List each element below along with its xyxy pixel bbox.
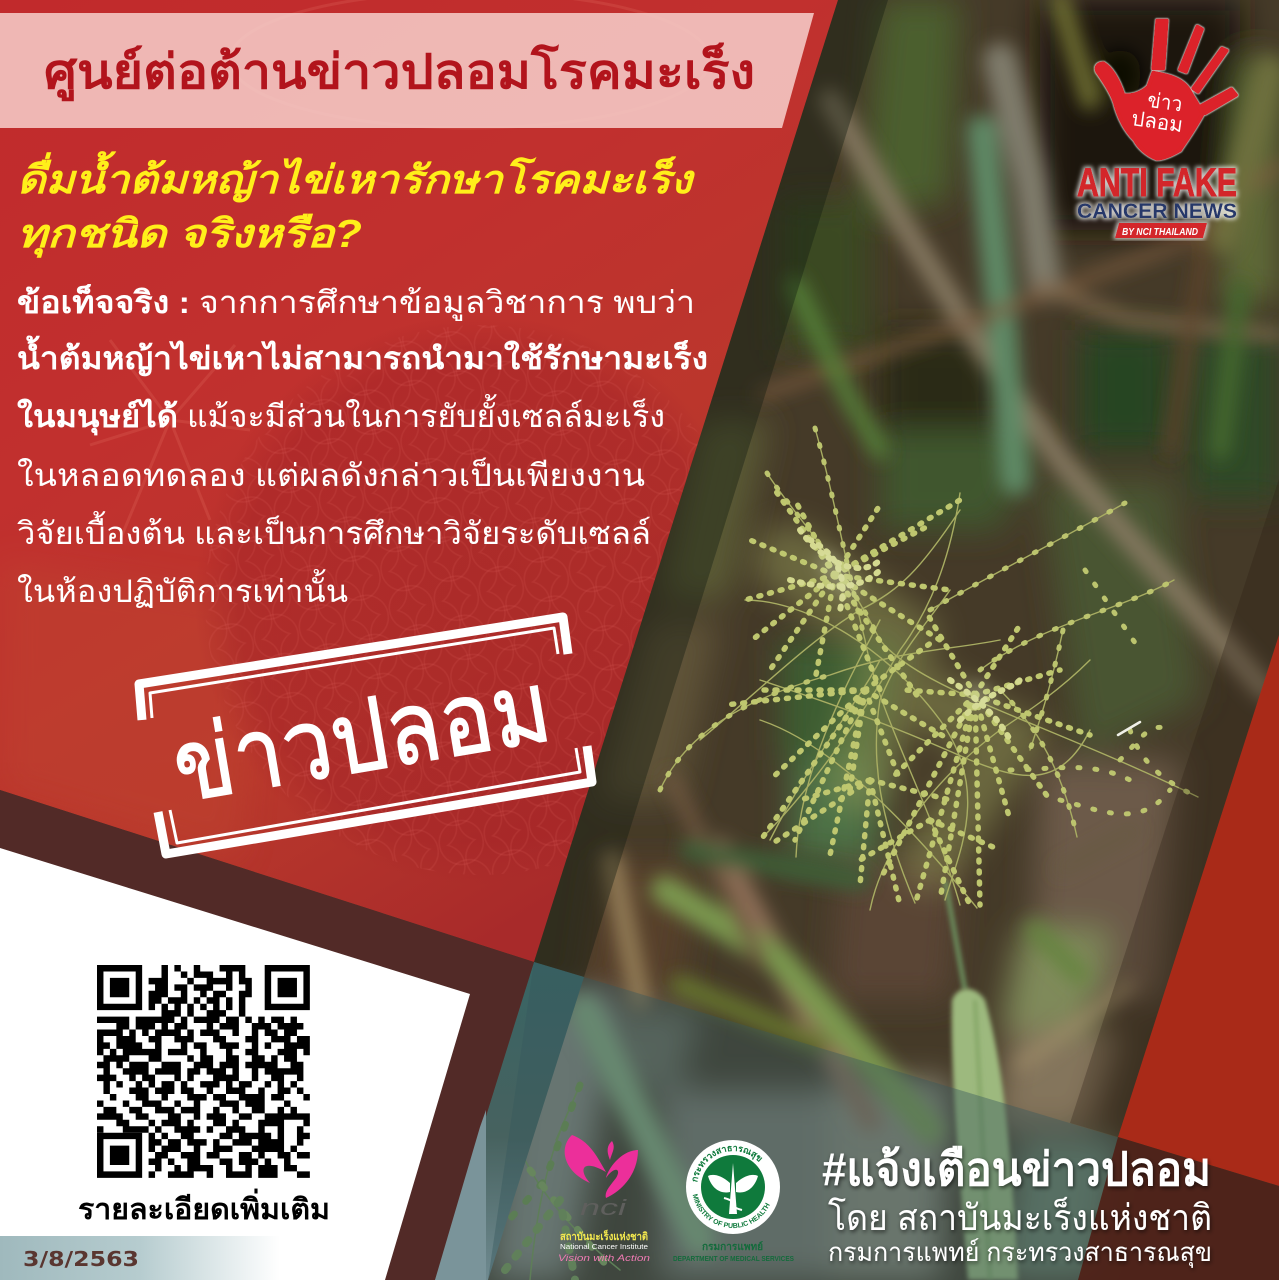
right red shape bbox=[1118, 635, 1279, 1186]
right diagonal strip bbox=[1070, 479, 1279, 1137]
tag: by NCI Thailand: BY NCI THAILAND bbox=[1122, 227, 1198, 238]
body text: fact check: ในหลอดทดลอง แต่ผลดังกล่าวเป็นเพียงงาน bbox=[17, 457, 645, 493]
date bar: 3/8/2563 bbox=[23, 1247, 139, 1271]
bottom translucent band bbox=[488, 962, 1279, 1280]
dark diagonal strip beside red panel bbox=[534, 0, 888, 977]
footer text: warning hashtag and organisation bbox=[822, 1143, 1212, 1268]
question heading: ทุกชนิด จริงหรือ? bbox=[17, 213, 362, 258]
body text: fact check: วิจัยเบื้องต้น และเป็นการศึกษาวิจัยระดับเซลล์ bbox=[16, 511, 651, 551]
footer text: warning hashtag and organisation: กรมการแพทย์ กระทรวงสาธารณสุข bbox=[828, 1237, 1212, 1268]
QR code bbox=[97, 965, 310, 1178]
QR caption: รายละเอียดเพิ่มเติม bbox=[78, 1188, 330, 1226]
left warm tone bbox=[0, 560, 260, 860]
logo: national cancer institute: National Cancer Institute bbox=[560, 1242, 648, 1251]
logo: ministry of public health: กรมการแพทย์ bbox=[702, 1241, 763, 1253]
white QR panel bbox=[0, 848, 470, 1280]
body text: fact check: แม้จะมีส่วนในการยับยั้งเซลล์มะเร็ง bbox=[187, 394, 665, 434]
body text: fact check bbox=[16, 283, 708, 609]
photo subject: flowering grass panicle bbox=[660, 428, 1198, 910]
logo: national cancer institute: nci bbox=[580, 1195, 628, 1220]
text: CANCER NEWS: CANCER NEWS bbox=[1077, 200, 1237, 223]
question heading bbox=[17, 151, 695, 258]
icon: red hand: ปลอม bbox=[1130, 107, 1184, 137]
red panel bbox=[0, 0, 838, 962]
icon: red hand bbox=[1097, 21, 1236, 159]
body text: fact check: ข้อเท็จจริง : bbox=[17, 283, 190, 320]
bottom right maroon corner bbox=[1078, 1137, 1279, 1280]
logo: national cancer institute bbox=[558, 1135, 650, 1263]
stamp: fake news: ข่าวปลอม bbox=[165, 651, 558, 824]
header band bbox=[0, 13, 814, 128]
body text: fact check: ในห้องปฏิบัติการเท่านั้น bbox=[17, 569, 348, 609]
logo: anti fake cancer news bbox=[1077, 21, 1237, 238]
question heading: ดื่มน้ำต้มหญ้าไข่เหารักษาโรคมะเร็ง bbox=[17, 151, 695, 203]
logo: national cancer institute: สถาบันมะเร็งแห่งชาติ bbox=[560, 1229, 648, 1243]
blue sliver bbox=[435, 1110, 486, 1280]
logo: ministry of public health bbox=[673, 1140, 794, 1263]
title: ศูนย์ต่อต้านข่าวปลอมโรคมะเร็ง bbox=[44, 42, 755, 102]
body text: fact check: จากการศึกษาข้อมูลวิชาการ พบว่า bbox=[199, 285, 695, 321]
footer text: warning hashtag and organisation: โดย สถาบันมะเร็งแห่งชาติ bbox=[828, 1195, 1212, 1238]
maroon band bbox=[0, 790, 534, 1280]
tag: by NCI Thailand bbox=[1115, 223, 1207, 238]
cell texture in red panel bbox=[90, 0, 698, 870]
small grass sprig bottom left bbox=[500, 1085, 620, 1280]
logo: ministry of public health: MINISTRY OF PUBLIC HEALTH bbox=[692, 1194, 770, 1228]
bud of the grass stem bbox=[945, 880, 1018, 1280]
logo: ministry of public health: กระทรวงสาธารณสุข bbox=[692, 1146, 762, 1182]
lower strip continuation bbox=[435, 962, 584, 1280]
body text: fact check: น้ำต้มหญ้าไข่เหาไม่สามารถนำมาใช้รักษามะเร็ง bbox=[17, 335, 708, 377]
icon: red hand: ข่าว bbox=[1146, 89, 1184, 116]
date bar bbox=[0, 1236, 280, 1280]
logo: national cancer institute: Vision with Action bbox=[558, 1253, 650, 1263]
logo: ministry of public health: DEPARTMENT OF MEDICAL SERVICES bbox=[673, 1254, 794, 1263]
footer text: warning hashtag and organisation: #แจ้งเตือนข่าวปลอม bbox=[822, 1143, 1211, 1195]
body text: fact check: ในมนุษย์ได้ bbox=[17, 398, 178, 436]
